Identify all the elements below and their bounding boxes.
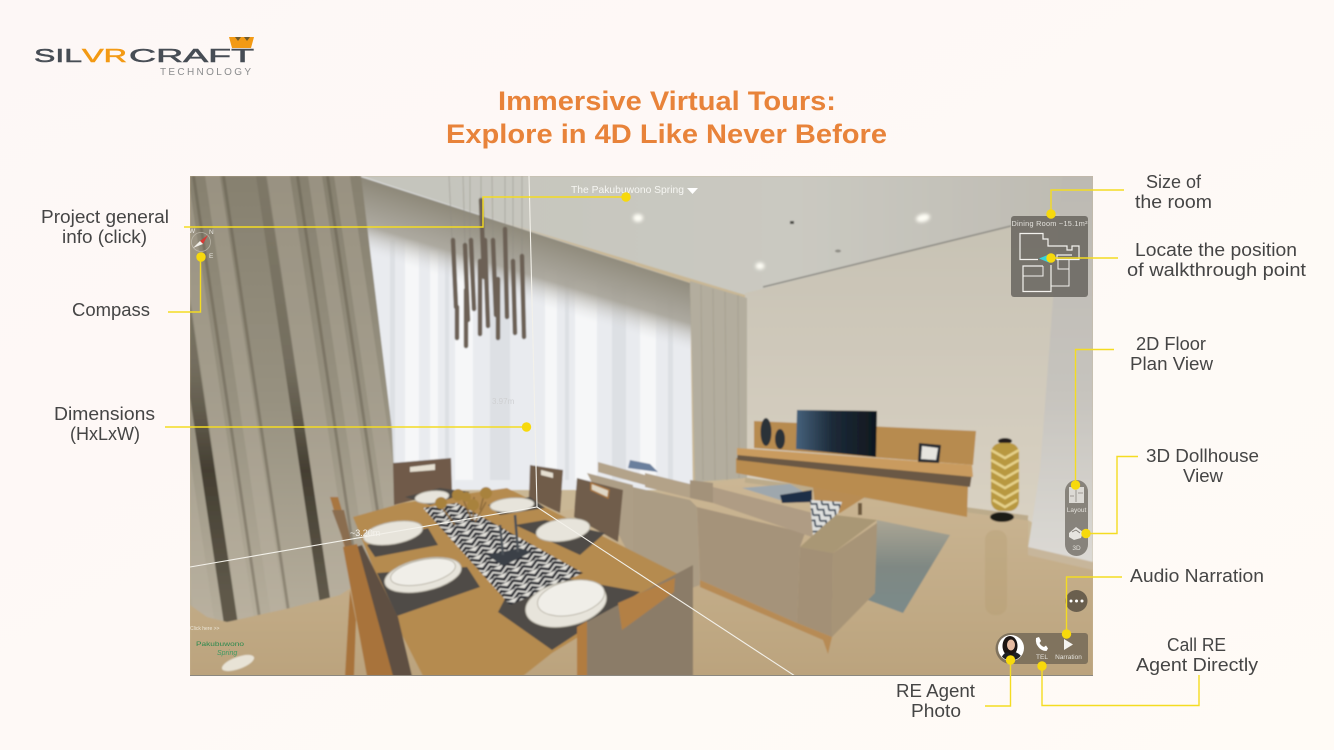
vases <box>760 418 785 449</box>
callout: dimensions: Dimensions <box>54 404 155 424</box>
television <box>796 410 877 457</box>
callout: dimensions <box>54 404 531 444</box>
narration caption: Narration <box>1055 654 1082 661</box>
project name dropdown: The Pakubuwono Spring <box>571 184 684 196</box>
callout: compass <box>72 252 206 320</box>
picture frame <box>918 443 941 463</box>
sofa <box>587 460 877 654</box>
compass <box>190 228 214 258</box>
callout: 2D floor plan view: 2D Floor <box>1136 334 1206 354</box>
agent portrait <box>998 635 1024 662</box>
callout: call RE agent <box>1037 635 1258 706</box>
agent contact bar <box>996 633 1088 664</box>
title: Explore in 4D Like Never Before <box>446 119 887 149</box>
far dining chairs <box>393 458 623 542</box>
dinner plates <box>362 489 611 634</box>
icon: layout <box>1069 487 1084 503</box>
compass: N <box>209 229 214 236</box>
ceiling lights <box>633 212 931 270</box>
right curtain <box>690 281 747 482</box>
icon: 3D house <box>1069 527 1083 540</box>
logo: Silvrcraft Technology: VR <box>82 46 127 66</box>
floor plan outline <box>1020 234 1079 292</box>
measurement label: height: 3.97m <box>492 397 515 406</box>
callout: 2D floor plan view: Plan View <box>1130 354 1214 374</box>
back wall <box>745 205 1093 560</box>
logo wordmark: SIL <box>34 46 82 66</box>
callout: call RE agent: Agent Directly <box>1136 655 1258 675</box>
logo: Silvrcraft Technology: CRAFT <box>129 46 254 66</box>
measurement label: width: ~3.20m <box>350 528 380 538</box>
front dining chair <box>577 565 693 676</box>
callout: call RE agent: Call RE <box>1167 635 1226 655</box>
TEL caption: TEL <box>1036 654 1048 661</box>
logo: Silvrcraft Technology <box>34 37 254 78</box>
callout: project general info <box>41 192 631 247</box>
compass: E <box>209 253 214 260</box>
left dining chairs <box>330 497 412 676</box>
callout: walkthrough position <box>1046 240 1306 280</box>
rug <box>868 520 950 613</box>
watermark text: Pakubuwono <box>196 642 245 648</box>
callout: walkthrough position: of walkthrough point <box>1127 260 1306 280</box>
callout: size of the room: Size of <box>1146 172 1202 192</box>
callout: RE agent photo: RE Agent <box>896 681 975 701</box>
watermark white spot <box>221 654 255 672</box>
panel: virtual tour panorama <box>128 175 1093 676</box>
callout: dimensions: (HxLxW) <box>70 424 140 444</box>
side toolbar: layout and 3D <box>1065 480 1088 556</box>
callout: project general info: info (click) <box>62 227 147 247</box>
right wall column <box>1028 176 1093 565</box>
callout: project general info: Project general <box>41 207 169 227</box>
callout: audio narration <box>1062 566 1264 639</box>
ceiling slot <box>763 226 1011 287</box>
icon: play narration <box>1064 639 1073 650</box>
table centerpiece <box>435 487 532 566</box>
walkthrough position marker <box>1039 255 1050 263</box>
callout: 2D floor plan view <box>1071 334 1214 490</box>
photo bottom edge <box>190 675 1093 676</box>
chevron table runner <box>423 503 583 605</box>
3D caption: 3D <box>1072 545 1081 552</box>
title <box>446 86 887 149</box>
title: Immersive Virtual Tours: <box>498 86 836 116</box>
layout caption: Layout <box>1067 507 1086 514</box>
chandelier <box>449 176 524 346</box>
callout: compass: Compass <box>72 300 150 320</box>
callout: 3D dollhouse view: 3D Dollhouse <box>1146 446 1259 466</box>
floor <box>190 478 1093 676</box>
logo subtitle: TECHNOLOGY <box>160 67 251 78</box>
compass: W <box>189 228 196 235</box>
left curtain <box>190 176 395 623</box>
sofa pillows <box>742 484 842 535</box>
sideboard <box>736 421 976 517</box>
callout: 3D dollhouse view <box>1081 446 1259 538</box>
watermark text <box>190 626 245 657</box>
callout: audio narration: Audio Narration <box>1130 566 1264 586</box>
icon: telephone <box>1036 637 1048 651</box>
room name and size: Dining Room ~15.1m² <box>1012 219 1088 228</box>
gold floor vase <box>986 437 1020 588</box>
dining table <box>353 488 680 676</box>
placemats <box>367 488 640 650</box>
callout: 3D dollhouse view: View <box>1183 466 1224 486</box>
watermark text: Click here >> <box>190 626 220 632</box>
callout: walkthrough position: Locate the position <box>1135 240 1297 260</box>
ceiling <box>350 176 1093 295</box>
coffee table <box>813 487 865 515</box>
mini map panel <box>1011 216 1088 297</box>
window with sheer curtains <box>361 176 693 490</box>
callout: RE agent photo <box>896 655 1015 721</box>
more options button <box>1066 590 1088 612</box>
callout: RE agent photo: Photo <box>911 701 961 721</box>
callout: size of the room: the room <box>1135 192 1212 212</box>
sheer curtain header band <box>355 175 692 350</box>
callout: size of the room <box>1046 172 1212 219</box>
measurement lines <box>190 176 795 676</box>
watermark text: Spring <box>217 650 237 657</box>
logo crown <box>229 37 254 48</box>
